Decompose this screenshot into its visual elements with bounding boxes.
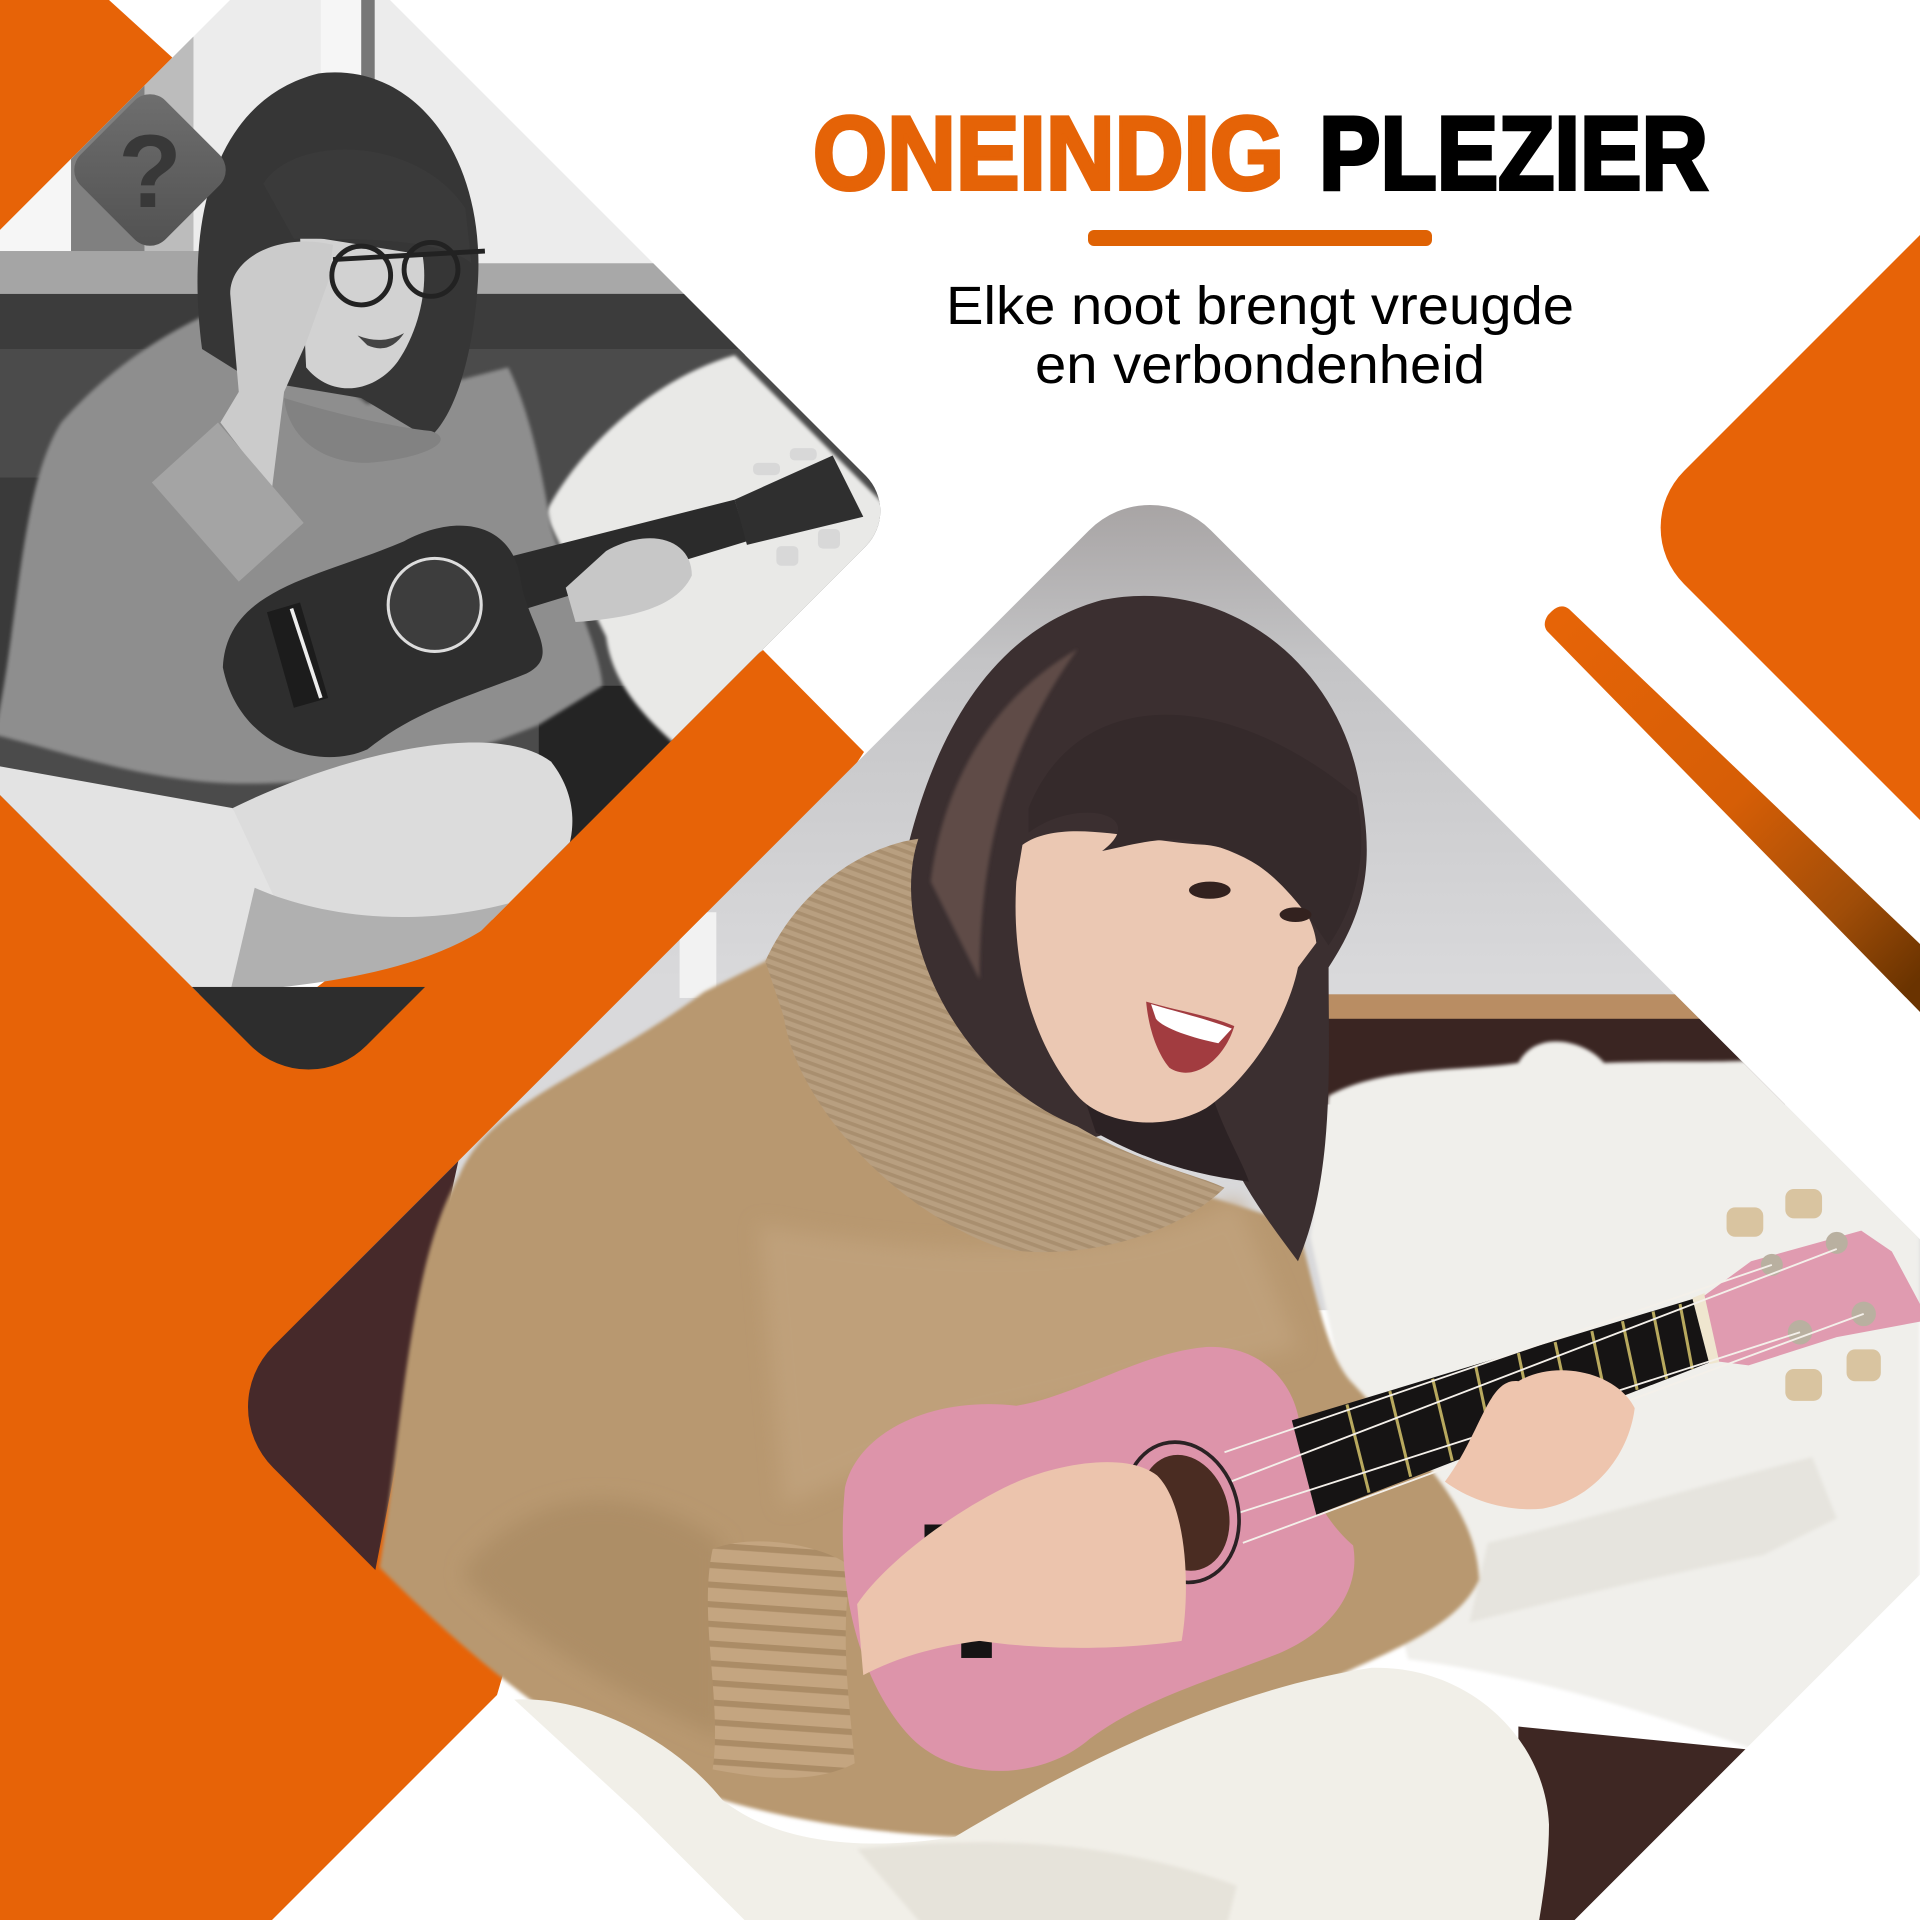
title: PLEZIER [1319, 96, 1708, 212]
colour photo: bridge ends [924, 1525, 992, 1658]
colour photo: wall [309, 505, 1920, 1310]
grey photo: mouth [358, 333, 404, 348]
grey photo: ukulele head [735, 456, 863, 545]
colour photo: shelf [1310, 994, 1714, 1021]
subtitle [946, 276, 1574, 395]
colour photo: pants [514, 1668, 1549, 1920]
grey photo: face [300, 235, 424, 388]
grey photo: collar [284, 398, 441, 463]
subtitle: en verbondenheid [1035, 335, 1485, 395]
grey photo: knee [233, 742, 572, 933]
colour photo: mouth [1146, 1002, 1234, 1073]
grey photo: sweater [0, 300, 602, 784]
colour photo: hair [891, 596, 1367, 1261]
colour photo: fringe [1029, 715, 1361, 945]
colour photo: strings [1224, 1249, 1864, 1543]
colour photo: blanket [1310, 1041, 1920, 1749]
icon: question mark badge [65, 85, 235, 255]
grey photo: ukulele neck [508, 500, 747, 609]
title [813, 96, 1708, 212]
colour photo: left cushion [248, 1161, 458, 1570]
colour photo: sweater highlight [759, 1200, 1298, 1506]
grey photo: window background [0, 0, 924, 882]
colour photo: sweater [380, 857, 1479, 1838]
colour photo: pants shading [857, 1842, 1237, 1920]
orange shape: large left band [0, 650, 864, 1920]
colour photo: ukulele head [1705, 1231, 1920, 1365]
colour photo: nut [1692, 1293, 1722, 1364]
colour photo: eyes [1189, 882, 1311, 922]
colour photo: hair under chin [1084, 1096, 1249, 1182]
photo: greyscale woman with ukulele [0, 0, 924, 1085]
colour photo: hair highlights [931, 649, 1078, 980]
grey photo: sock [230, 888, 520, 992]
orange shape: top-left triangle [0, 0, 175, 232]
colour photo: blanket fringe [1469, 1457, 1837, 1622]
colour photo: ukulele body [843, 1347, 1354, 1771]
grey photo: hair [197, 72, 478, 438]
colour photo: ukulele fretboard [1292, 1298, 1712, 1515]
colour photo: fretting hand [1445, 1370, 1635, 1509]
orange shape: right rounded diamond [1661, 235, 1920, 820]
colour photo: sound hole [1109, 1429, 1254, 1595]
colour photo: sofa seat [1518, 1727, 1763, 1920]
grey photo: tuners [753, 448, 840, 566]
colour photo: dark sofa back [1328, 1018, 1785, 1104]
icon: question mark badge: ? [118, 114, 182, 230]
colour photo: tuners [1727, 1189, 1881, 1401]
photo: smiling woman with pink ukulele [184, 453, 1920, 1920]
colour photo: face [1016, 831, 1316, 1123]
title: ONEINDIG [813, 96, 1284, 212]
colour photo: collar [765, 839, 1224, 1252]
colour photo: sleeve cuff [708, 1541, 855, 1778]
colour photo: frets [1347, 1304, 1692, 1493]
grey photo: leg [0, 765, 294, 994]
colour photo: window strip [680, 912, 716, 998]
grey photo: arm and raised hand [220, 242, 333, 490]
grey photo: ukulele body [223, 526, 543, 757]
accent bar: diagonal gradient [1545, 606, 1920, 1012]
grey photo: fretting hand [566, 538, 692, 622]
colour photo: tuner pegs [1761, 1232, 1876, 1345]
colour photo: sweater shading [476, 1507, 714, 1722]
subtitle: Elke noot brengt vreugde [946, 276, 1574, 336]
grey photo: bridge [267, 602, 328, 708]
title underline [1088, 230, 1432, 246]
grey photo: fringe [300, 235, 324, 239]
colour photo: strumming hand [857, 1462, 1186, 1675]
grey photo: sofa base [192, 986, 426, 1070]
grey photo: sleeve cuff [152, 422, 304, 582]
grey photo: sound hole [388, 558, 481, 651]
grey photo: glasses [332, 242, 485, 305]
grey photo: blanket [545, 355, 894, 753]
